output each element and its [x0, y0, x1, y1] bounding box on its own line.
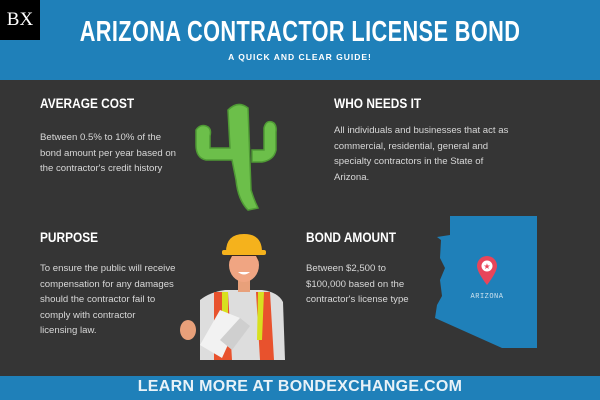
header band	[0, 0, 600, 80]
panel: average cost	[40, 96, 176, 174]
subtitle: A QUICK AND CLEAR GUIDE!	[228, 52, 372, 62]
text: Between $2,500 to	[306, 263, 386, 274]
text: commercial, residential, general and	[334, 140, 488, 152]
text	[334, 125, 508, 182]
panel: bond amount	[306, 230, 409, 305]
icon: location pin: ★	[483, 262, 491, 271]
text: Arizona.	[334, 172, 369, 182]
heading: BOND AMOUNT	[306, 230, 396, 245]
heading: AVERAGE COST	[40, 96, 134, 111]
text: comply with contractor	[40, 310, 135, 320]
text: licensing law.	[40, 325, 97, 336]
text: contractor's license type	[306, 294, 409, 305]
map label: ARIZONA	[471, 293, 504, 301]
map: Arizona	[435, 216, 537, 348]
text: Between 0.5% to 10% of the	[40, 132, 161, 143]
text	[306, 263, 409, 305]
text: compensation for any damages	[40, 278, 174, 290]
logo BX	[0, 0, 40, 40]
panel: who needs it	[334, 96, 508, 182]
text: All individuals and businesses that act as	[334, 125, 508, 136]
text: bond amount per year based on	[40, 148, 176, 158]
logo BX: BX	[7, 9, 33, 30]
heading: WHO NEEDS IT	[334, 96, 421, 111]
text: the contractor's credit history	[40, 163, 162, 174]
text: $100,000 based on the	[306, 278, 404, 290]
panel: purpose	[40, 230, 175, 336]
heading: PURPOSE	[40, 230, 98, 245]
text: specialty contractors in the State of	[334, 156, 483, 167]
icon: construction worker	[180, 234, 285, 360]
icon: cactus	[196, 104, 276, 210]
text: To ensure the public will receive	[40, 263, 175, 274]
title: ARIZONA CONTRACTOR LICENSE BOND	[80, 16, 520, 48]
text: should the contractor fail to	[40, 294, 155, 305]
footer: LEARN MORE AT BONDEXCHANGE.COM	[138, 378, 462, 395]
text	[40, 263, 175, 336]
text	[40, 132, 176, 174]
footer	[0, 376, 600, 400]
